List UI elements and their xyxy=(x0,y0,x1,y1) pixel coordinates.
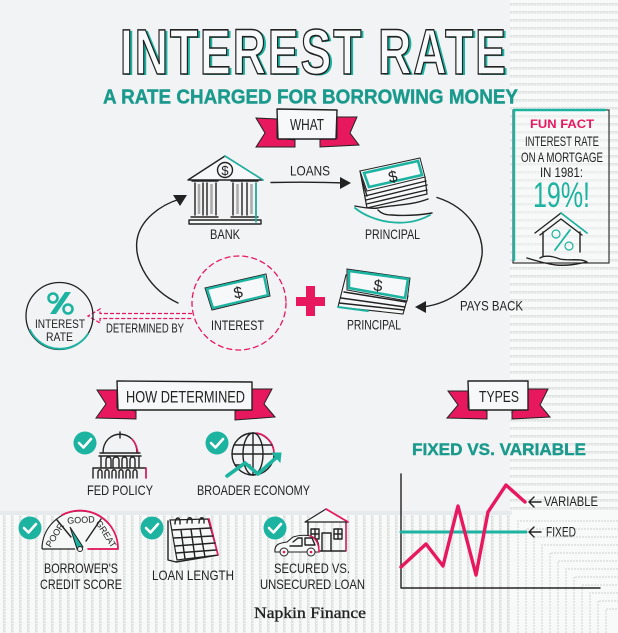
label: fed policy: FED POLICY xyxy=(87,482,154,498)
icon: credit gauge: GOOD xyxy=(67,514,95,526)
title: INTEREST RATE xyxy=(122,18,510,89)
brand: Napkin Finance xyxy=(254,605,366,622)
line chart: FIXED xyxy=(546,524,576,540)
banner: types: TYPES xyxy=(479,389,519,406)
arrow: loans xyxy=(271,177,351,189)
subtitle: A RATE CHARGED FOR BORROWING MONEY xyxy=(103,86,519,108)
arrow: determined by xyxy=(88,309,192,323)
icon: credit gauge: GREAT xyxy=(94,518,119,550)
label: pays back: PAYS BACK xyxy=(460,298,524,314)
label: secured loan: SECURED VS. xyxy=(274,560,350,576)
interest circle xyxy=(192,256,286,350)
label: credit score xyxy=(40,560,122,592)
label: broader economy: BROADER ECONOMY xyxy=(197,482,311,498)
label: principal top: PRINCIPAL xyxy=(365,226,420,242)
icon: principal stack xyxy=(338,269,410,314)
arrow: pays back xyxy=(415,198,482,313)
interest circle: $ xyxy=(232,284,245,303)
panel: fun fact: IN 1981: xyxy=(540,164,583,180)
icon: bank: $ xyxy=(221,163,229,178)
banner: what xyxy=(256,109,359,147)
panel: fun fact: 19%! xyxy=(533,176,590,215)
title: INTEREST RATE xyxy=(120,17,508,88)
icon: calendar xyxy=(168,518,218,562)
banner: how determined xyxy=(96,381,275,420)
check: loan length xyxy=(140,516,164,540)
label: credit score: CREDIT SCORE xyxy=(40,576,122,592)
panel: fun fact xyxy=(513,110,609,265)
panel: fun fact: FUN FACT xyxy=(530,117,595,131)
label: bank: BANK xyxy=(210,226,241,242)
check: broader economy xyxy=(206,432,228,454)
check: secured loan xyxy=(264,516,286,540)
line chart: VARIABLE xyxy=(544,493,598,509)
icon: plus xyxy=(296,286,325,316)
label: loans: LOANS xyxy=(290,162,330,178)
label: secured loan: UNSECURED LOAN xyxy=(260,576,365,592)
icon: principal in hand: $ xyxy=(387,168,399,187)
icon: credit gauge: POOR xyxy=(44,521,67,549)
line chart xyxy=(401,474,600,588)
icon: globe with arrow xyxy=(227,433,281,476)
banner: how determined: HOW DETERMINED xyxy=(126,388,245,406)
icon: house and car xyxy=(275,509,348,556)
label: principal bottom: PRINCIPAL xyxy=(347,316,401,332)
interest circle: INTEREST xyxy=(211,317,264,333)
label: loan length: LOAN LENGTH xyxy=(152,567,234,583)
heading: fixed vs variable: FIXED VS. VARIABLE xyxy=(412,440,586,459)
interest rate badge: RATE xyxy=(46,330,73,344)
check: credit score xyxy=(18,516,42,540)
interest rate badge: INTEREST xyxy=(35,317,86,331)
label: secured loan xyxy=(260,560,365,592)
arrow: bank return xyxy=(137,195,187,303)
label: determined by: DETERMINED BY xyxy=(106,320,184,336)
icon: principal stack: $ xyxy=(373,278,383,295)
icon: capitol xyxy=(93,432,146,478)
check: fed policy xyxy=(74,432,96,454)
icon: credit gauge xyxy=(42,510,119,552)
label: credit score: BORROWER'S xyxy=(44,560,118,576)
interest rate badge xyxy=(26,282,93,350)
icon: bank xyxy=(188,156,263,224)
banner: what: WHAT xyxy=(290,117,324,134)
banner: types xyxy=(447,381,550,419)
icon: principal in hand xyxy=(355,158,432,223)
